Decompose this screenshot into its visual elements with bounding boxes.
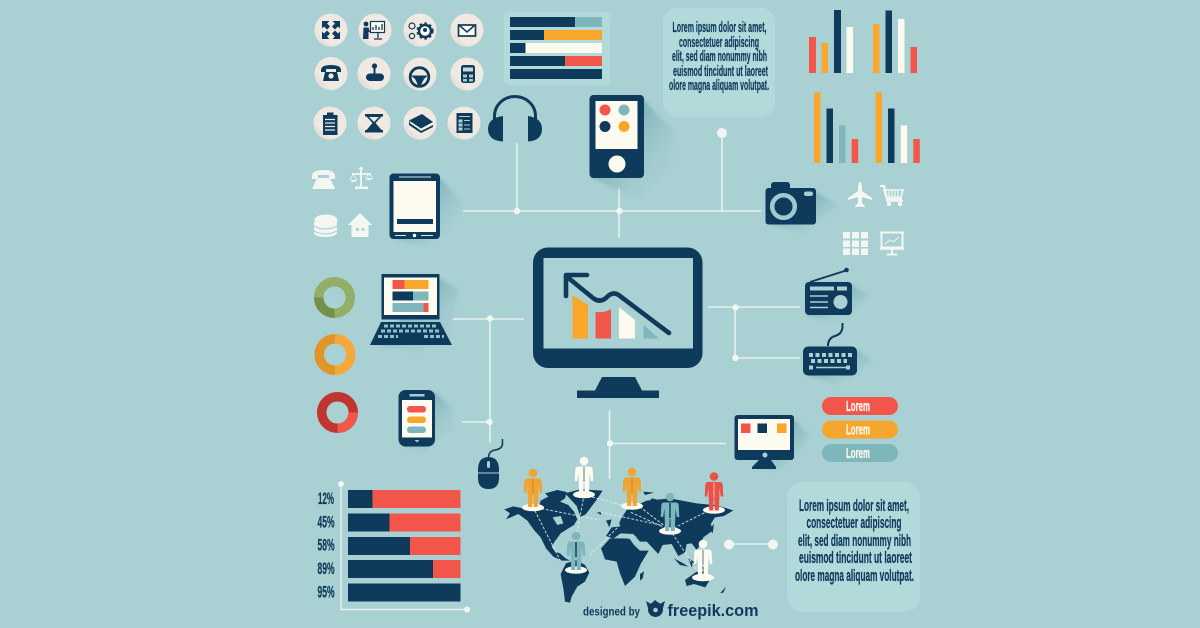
icon: grid of squares [843,232,868,255]
bar chart: top right group two [873,10,917,73]
text block: bottom bubble [787,482,920,612]
pill: red Lorem: Lorem [846,398,870,415]
pill: teal Lorem [822,444,898,462]
person: teal, South America [565,532,587,574]
person: white, Greenland [573,457,595,498]
icon: headphones [488,96,542,142]
icon: presenter [358,14,392,47]
pill: teal Lorem: Lorem [846,445,870,462]
chart: horizontal percentage bars: 12% [318,490,334,508]
icon: freepik logo [646,600,665,617]
icon: gears [404,14,436,47]
person: cream, Australia [692,540,714,581]
chart: horizontal percentage bars: 95% [318,584,335,602]
icon: smartphone [398,390,452,452]
icon: tablet left [390,174,460,246]
pill: orange Lorem: Lorem [846,422,870,438]
pill: red Lorem [822,397,898,415]
credit: designed by freepik.com: designed by [583,606,641,618]
text block: top bubble: olore magna aliquam volutpat. [669,78,769,94]
icon: shopping cart [880,186,903,206]
trend arrow [566,275,669,333]
text block: top bubble: consectetuer adipiscing [679,35,759,51]
chart bars on monitor [572,295,659,338]
icon: telephone [314,57,348,90]
chart: orange donut [319,339,351,370]
credit: designed by freepik.com: freepik.com [668,602,758,620]
icon: small monitor [734,415,810,472]
text block: top bubble: elit, sed diam nonummy nibh [672,49,767,65]
dashed connections on map [533,495,710,575]
bar chart: top right group one [809,10,853,73]
icon: computer mouse [478,439,502,489]
icon: house [348,213,372,237]
chart: horizontal percentage bars [318,481,470,612]
icon: white telephone [312,170,335,189]
icon: keyboard [803,323,872,384]
text block: bottom bubble: elit, sed diam nonummy nibh [798,532,911,550]
person: teal, Asia [659,493,681,535]
credit: designed by freepik.com [583,600,758,620]
icon: camera [766,182,838,234]
icon: calculator [450,58,484,90]
person: orange, Europe [621,468,643,510]
icon: envelope [450,14,484,47]
icon: expand arrows [314,14,348,47]
text block: top bubble: Lorem ipsum dolor sit amet, [672,20,766,36]
text block: bottom bubble: euismod tincidunt ut laoreet [799,549,912,567]
icon: hourglass [358,106,390,140]
world map [504,489,733,603]
icon: radio [805,268,868,322]
icon: coins [314,214,338,237]
panel: stacked bars top [504,12,610,85]
icon: presentation screen [880,232,904,254]
chart: horizontal percentage bars: 58% [318,536,335,554]
bar chart: lower group one [814,92,858,163]
icon: scales [350,167,373,189]
connector lines [453,128,800,550]
chart: green donut [319,282,350,313]
person: red, East Asia [703,472,725,514]
chart: red donut [322,397,353,428]
chart: horizontal percentage bars: 45% [318,514,335,532]
bar chart: lower group two [876,92,920,163]
text block: bottom bubble: consectetuer adipiscing [806,514,902,532]
icon: steering wheel [404,58,436,90]
icon: laptop [370,274,458,352]
icon: airplane [848,182,872,207]
icon: clipboard [314,106,346,140]
text block: bottom bubble: olore magna aliquam volutpat. [795,567,914,585]
text block: top bubble [663,8,775,117]
chart: horizontal percentage bars: 89% [318,560,335,578]
icon grid: twelve round icons [314,14,484,140]
text block: bottom bubble: Lorem ipsum dolor sit amet, [799,497,909,515]
icon: main monitor with chart [533,248,702,398]
icon: form [448,106,480,140]
icon: book [404,106,436,140]
icon: joystick [358,57,390,90]
person: orange, North America [522,469,544,511]
icon: tablet with coloured dots [590,95,672,200]
text block: top bubble: euismod tincidunt ut laoreet [673,64,768,80]
pill: orange Lorem [822,420,898,438]
